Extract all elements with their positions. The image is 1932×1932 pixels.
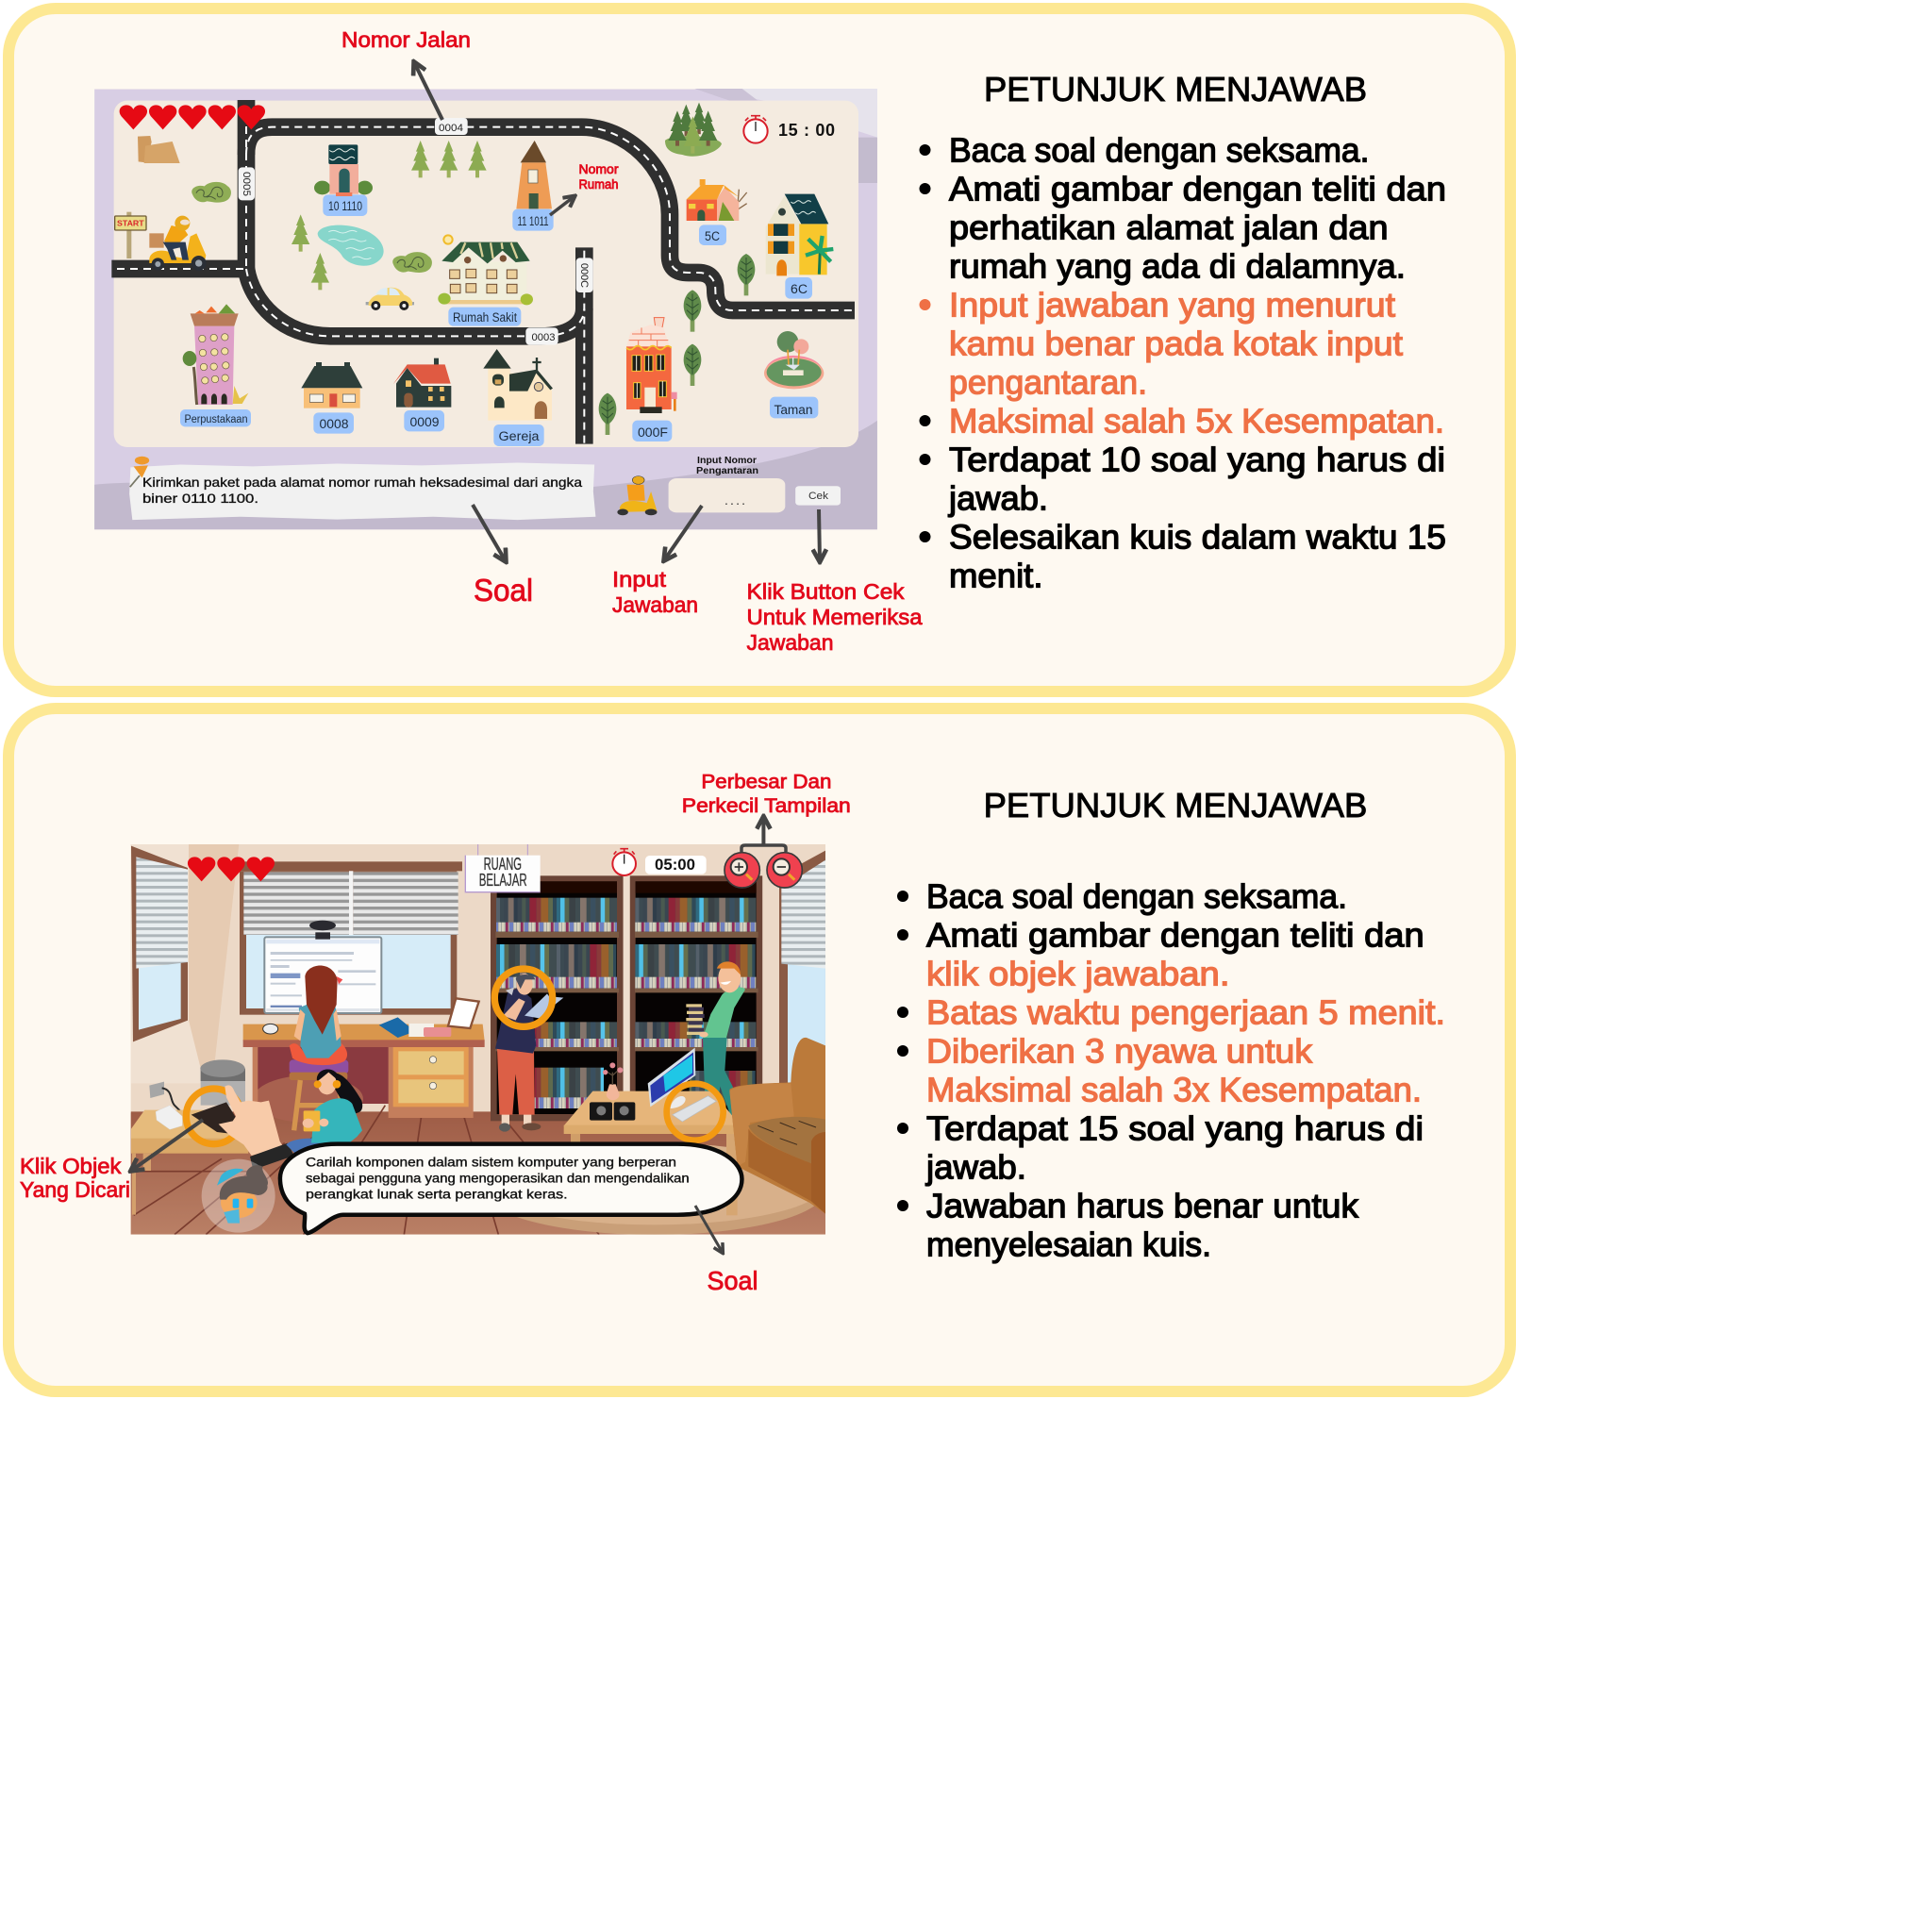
map text labels: 000C bbox=[578, 263, 590, 288]
game screenshot: delivery map bbox=[94, 89, 877, 529]
map text labels: 0004 bbox=[439, 123, 463, 134]
answer input box bbox=[669, 478, 785, 512]
question note paper bbox=[129, 457, 595, 520]
room text labels: Carilah komponen dalam sistem komputer yang berperan bbox=[306, 1155, 676, 1169]
sign: ruang belajar bbox=[465, 844, 541, 892]
sitting girl with headphones bbox=[286, 1070, 362, 1158]
map text labels: 6C bbox=[791, 282, 808, 296]
map text labels: 000F bbox=[638, 425, 668, 440]
speakers bbox=[590, 1102, 635, 1121]
hospital bbox=[438, 235, 533, 305]
church bbox=[483, 349, 553, 421]
room walls and floor bbox=[127, 844, 828, 1235]
game screenshot: study room bbox=[127, 844, 828, 1235]
annotation: Klik Objek Yang Dicari: Klik Objek bbox=[20, 1154, 122, 1178]
heading: petunjuk menjawab top: PETUNJUK MENJAWAB bbox=[984, 70, 1367, 108]
avatar bubble bbox=[202, 1159, 275, 1233]
timer clock and pill bbox=[612, 849, 707, 875]
annotation: Klik Objek Yang Dicari: Yang Dicari bbox=[20, 1177, 130, 1202]
house 000F bbox=[626, 318, 677, 413]
cream map board bbox=[114, 101, 858, 447]
map text labels: 0003 bbox=[532, 332, 555, 343]
tower 11 1011 bbox=[516, 141, 552, 208]
map text labels: Cek bbox=[808, 491, 829, 502]
zoom buttons bbox=[724, 853, 802, 888]
house 6C bbox=[766, 194, 833, 275]
instruction list top: pengantaran. bbox=[949, 363, 1147, 402]
map text labels: 0005 bbox=[241, 172, 252, 196]
hearts bbox=[120, 105, 265, 129]
mouse and keyboard bbox=[671, 1096, 716, 1122]
map text labels bbox=[142, 121, 835, 508]
forest clump bbox=[665, 103, 722, 157]
panel: room object quiz instructions bbox=[8, 708, 1510, 1391]
check button bbox=[795, 486, 841, 506]
map text labels: Taman bbox=[774, 403, 813, 417]
annotation: Nomor Rumah: Rumah bbox=[579, 176, 619, 192]
hearts row bbox=[188, 857, 275, 881]
map text labels: Perpustakaan bbox=[185, 414, 247, 425]
small scooter bbox=[617, 476, 657, 515]
monitor with webcam bbox=[264, 921, 381, 1013]
pond bbox=[318, 225, 384, 266]
speech bubble bbox=[280, 1144, 741, 1233]
instruction list bottom: Amati gambar dengan teliti dan bbox=[926, 915, 1424, 955]
map text labels: 10 1110 bbox=[328, 199, 362, 213]
orange target ring right bbox=[667, 1084, 724, 1141]
annotation: Klik Button Cek: Jawaban bbox=[747, 630, 834, 655]
orange target ring left bbox=[186, 1089, 242, 1144]
instruction list bottom: menyelesaian kuis. bbox=[926, 1224, 1211, 1264]
room text labels: sebagai pengguna yang mengoperasikan dan mengendalikan bbox=[306, 1171, 690, 1185]
annotation: Nomor Jalan: Nomor Jalan bbox=[341, 27, 471, 52]
annotation: Soal bbox=[473, 505, 533, 608]
instruction list bottom: jawab. bbox=[925, 1147, 1026, 1187]
right window bbox=[762, 851, 825, 1084]
bookcases bbox=[491, 873, 762, 1124]
instruction list bottom bbox=[897, 877, 1445, 1264]
timer clock bbox=[743, 116, 768, 143]
map text labels: 15 : 00 bbox=[778, 121, 835, 140]
annotation: Perbesar Dan Perkecil Tampilan: Perkecil Tampilan bbox=[682, 795, 851, 817]
panel frame top bbox=[8, 8, 1510, 691]
room text labels: perangkat lunak serta perangkat keras. bbox=[306, 1187, 568, 1201]
trees bbox=[291, 141, 755, 435]
room text labels bbox=[306, 855, 695, 1201]
annotation: Klik Button Cek bbox=[747, 509, 923, 655]
outlet and cable bbox=[149, 1081, 181, 1110]
boy with books bbox=[686, 961, 745, 1130]
map text labels: Rumah Sakit bbox=[453, 310, 517, 325]
annotation: Soal bottom bbox=[695, 1206, 758, 1295]
reading man bbox=[495, 974, 563, 1132]
map text labels: 0008 bbox=[319, 417, 349, 431]
instruction list top: Terdapat 10 soal yang harus di bbox=[949, 441, 1445, 479]
pointing hand bbox=[219, 1085, 294, 1170]
instruction list top: menit. bbox=[949, 557, 1043, 595]
instruction list bottom: Maksimal salah 3x Kesempatan. bbox=[926, 1070, 1422, 1109]
scanner object bbox=[192, 1102, 238, 1134]
annotation: Soal: Soal bbox=[474, 573, 533, 608]
annotation: Input Jawaban bbox=[612, 506, 702, 617]
main window with blinds bbox=[240, 861, 462, 1015]
map text labels: 5C bbox=[705, 229, 720, 243]
annotation: Klik Objek Yang Dicari bbox=[20, 1120, 203, 1202]
house 10 1110 bbox=[314, 144, 373, 196]
instruction list top: kamu benar pada kotak input bbox=[949, 325, 1403, 363]
annotation: Klik Button Cek: Klik Button Cek bbox=[747, 579, 905, 604]
map background bbox=[94, 90, 877, 529]
annotation: Soal bottom: Soal bbox=[708, 1266, 758, 1295]
annotation: Perbesar Dan Perkecil Tampilan: Perbesar Dan bbox=[701, 772, 831, 792]
instruction list top: jawab. bbox=[948, 479, 1048, 518]
library building bbox=[183, 304, 248, 405]
orange target ring man bbox=[494, 969, 553, 1026]
instruction list bottom: Diberikan 3 nyawa untuk bbox=[926, 1032, 1313, 1070]
map text labels: 0009 bbox=[409, 415, 440, 429]
house 0009 bbox=[393, 358, 451, 408]
map text labels: Kirimkan paket pada alamat nomor rumah heksadesimal dari angka bbox=[142, 475, 582, 490]
park fountain bbox=[764, 331, 824, 389]
annotation: Nomor Jalan bbox=[341, 27, 471, 120]
rug bbox=[517, 1145, 814, 1235]
instruction list top bbox=[919, 131, 1446, 595]
coffee table bbox=[564, 1091, 741, 1215]
armchair bbox=[729, 1038, 825, 1214]
instruction list bottom: Batas waktu pengerjaan 5 menit. bbox=[926, 992, 1445, 1032]
bushes bbox=[192, 182, 432, 273]
rock bbox=[138, 136, 180, 163]
room text labels: RUANG bbox=[484, 855, 522, 874]
instruction list top: Input jawaban yang menurut bbox=[949, 286, 1395, 325]
start sign bbox=[115, 212, 146, 258]
house label chips bbox=[180, 194, 818, 446]
instruction list top: Baca soal dengan seksama. bbox=[949, 131, 1370, 170]
map corner shading bbox=[695, 89, 877, 183]
map text labels: Gereja bbox=[498, 429, 540, 443]
instruction list top: Amati gambar dengan teliti dan bbox=[949, 170, 1446, 208]
annotation: Input Jawaban: Jawaban bbox=[612, 592, 698, 617]
rubbish bin bbox=[200, 1059, 245, 1106]
map text labels: biner 0110 1100. bbox=[142, 491, 258, 506]
instruction list bottom: klik objek jawaban. bbox=[926, 955, 1230, 992]
annotation: Perbesar Dan Perkecil Tampilan bbox=[682, 772, 851, 852]
car bbox=[366, 288, 414, 310]
map text labels: .... bbox=[724, 492, 745, 508]
house 5C bbox=[687, 179, 747, 221]
map text labels: Input Nomor bbox=[697, 456, 757, 466]
roads bbox=[111, 100, 855, 444]
instruction list top: Maksimal salah 5x Kesempatan. bbox=[949, 402, 1444, 441]
room text labels: BELAJAR bbox=[479, 871, 527, 890]
instruction list bottom: Baca soal dengan seksama. bbox=[926, 877, 1347, 915]
annotation: Nomor Rumah bbox=[550, 161, 619, 215]
start sign: START bbox=[117, 218, 144, 227]
scooter rider bbox=[149, 216, 207, 271]
house 0008 bbox=[301, 362, 362, 408]
annotation: Nomor Rumah: Nomor bbox=[579, 161, 619, 176]
map text labels: Pengantaran bbox=[696, 466, 758, 476]
heading: petunjuk menjawab bottom: PETUNJUK MENJAWAB bbox=[984, 786, 1367, 824]
annotation: Input Jawaban: Input bbox=[612, 567, 667, 591]
map text labels: 11 1011 bbox=[517, 214, 549, 228]
panel frame bottom bbox=[8, 708, 1510, 1391]
girl at desk bbox=[290, 966, 348, 1130]
road number plates bbox=[239, 118, 593, 345]
flower vase bbox=[603, 1062, 623, 1100]
instruction list bottom: Jawaban harus benar untuk bbox=[926, 1187, 1359, 1224]
left window bbox=[131, 846, 188, 1041]
room text labels: 05:00 bbox=[655, 856, 695, 874]
desk and drawers bbox=[243, 998, 485, 1123]
computer screen bbox=[648, 1048, 695, 1107]
instruction list top: rumah yang ada di dalamnya. bbox=[949, 247, 1406, 286]
instruction list top: perhatikan alamat jalan dan bbox=[949, 208, 1389, 247]
instruction list bottom: Terdapat 15 soal yang harus di bbox=[926, 1109, 1424, 1147]
instruction list top: Selesaikan kuis dalam waktu 15 bbox=[949, 518, 1446, 557]
annotation: Klik Button Cek: Untuk Memeriksa bbox=[747, 605, 923, 629]
panel: road delivery quiz instructions bbox=[8, 8, 1510, 691]
side table bbox=[131, 1106, 248, 1215]
